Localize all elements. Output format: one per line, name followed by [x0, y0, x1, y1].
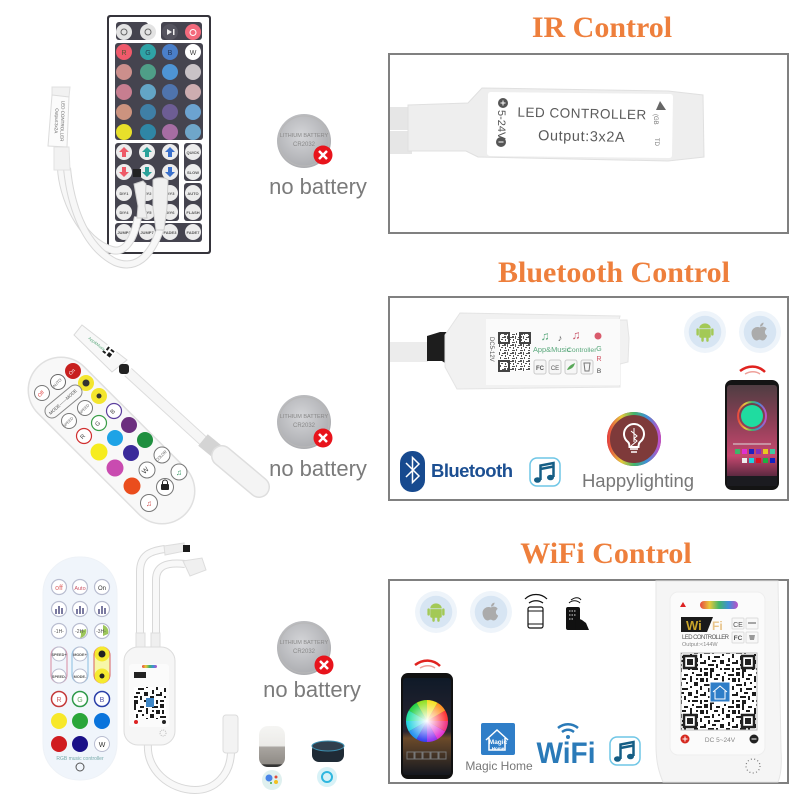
icon: android — [415, 591, 457, 633]
icon: apple — [739, 311, 781, 353]
Bluetooth controller close-up: ♫ — [572, 328, 580, 342]
Bluetooth controller close-up: ♫ — [540, 329, 550, 343]
WiFi remote control: Auto — [74, 586, 86, 592]
Bluetooth section — [34, 256, 788, 512]
IR remote control: DIY6 — [166, 210, 175, 215]
panel: IR controller close-up: TD — [653, 138, 659, 147]
IR remote control: SLOW — [187, 170, 199, 175]
logo: Bluetooth — [400, 451, 513, 492]
WiFi remote control: SPEED+ — [51, 653, 67, 657]
Bluetooth remote control — [34, 363, 187, 512]
Bluetooth controller close-up: B — [597, 368, 601, 375]
Bluetooth controller close-up: ♪ — [558, 333, 562, 343]
no battery badge: WiFi: LITHIUM BATTERY — [280, 640, 329, 646]
heading: IR Control: IR Control — [532, 11, 672, 44]
icon: music app — [610, 737, 640, 765]
IR remote control: DIY2 — [143, 191, 152, 196]
WiFi controller close-up: Wi — [686, 618, 702, 633]
mini IR controller with cables: LED CONTROLLER — [59, 101, 66, 142]
WiFi section — [43, 537, 788, 790]
Bluetooth remote control: COLOR — [154, 449, 168, 463]
WiFi remote control: MODE- — [74, 675, 87, 679]
no battery badge: Bluetooth: no battery — [269, 456, 367, 481]
IR remote control: FADE7 — [187, 230, 200, 235]
WiFi controller close-up: Output:<144W — [682, 642, 718, 648]
IR section — [48, 11, 788, 264]
WiFi controller close-up: DC 5~24V — [705, 737, 736, 744]
WiFi remote control: RGB music controller — [56, 756, 104, 762]
WiFi remote control: On — [98, 586, 106, 592]
IR remote control: JUMP7 — [140, 230, 154, 235]
label: Happylighting: Happylighting — [582, 470, 694, 491]
Bluetooth controller close-up: App&Music — [533, 345, 571, 354]
Bluetooth remote control: B — [110, 409, 117, 416]
icon: Magic Home app: Home — [492, 746, 505, 751]
heading: Bluetooth Control: Bluetooth Control — [498, 256, 730, 289]
icon: red signal arcs — [415, 661, 440, 668]
Bluetooth remote control: ♫ — [176, 468, 182, 477]
Bluetooth remote control: Off — [37, 389, 46, 399]
Bluetooth remote control: SPEED — [62, 416, 74, 428]
IR remote control: QUICK — [187, 150, 200, 155]
icon: apple — [470, 591, 512, 633]
IR remote control — [107, 15, 211, 254]
Bluetooth remote control: ♫ — [146, 499, 152, 508]
Bluetooth remote control: SPEED — [78, 403, 90, 415]
Bluetooth remote control: R — [80, 433, 87, 441]
no battery badge: WiFi: no battery — [263, 677, 361, 702]
panel: WiFi controller features — [389, 580, 788, 783]
WiFi remote control: G — [77, 697, 83, 704]
no battery badge: Bluetooth: LITHIUM BATTERY — [280, 414, 329, 420]
IR remote control: DIY1 — [120, 191, 129, 196]
WiFi remote control: MODE+ — [73, 653, 88, 657]
Bluetooth controller close-up: FC — [536, 366, 545, 372]
app screenshot: Bluetooth phone — [725, 380, 779, 490]
no battery badge: Bluetooth — [269, 395, 367, 481]
WiFi remote control: SPEED- — [52, 675, 67, 679]
Bluetooth remote control: G — [95, 420, 102, 428]
icon: smart speaker with assistant — [259, 726, 285, 790]
icon: hand with remote — [566, 598, 589, 630]
heading: WiFi Control: WiFi Control — [520, 537, 692, 570]
no battery badge: IR — [269, 114, 367, 199]
IR remote control: DIY5 — [143, 210, 152, 215]
IR remote control: FLASH — [186, 210, 200, 215]
Bluetooth mini controller and cable — [74, 325, 259, 487]
WiFi remote control: W — [99, 742, 106, 749]
logo: WiFi: WiFi — [536, 737, 596, 770]
mini IR controller with cables — [48, 87, 168, 264]
icon: android — [684, 311, 726, 353]
no battery badge: IR: no battery — [269, 174, 367, 199]
no battery badge: Bluetooth: CR2032 — [293, 423, 316, 429]
icon: echo dot with alexa — [312, 741, 344, 787]
IR remote control: B — [168, 50, 173, 57]
IR remote control: JUMP3 — [117, 230, 131, 235]
logo: WiFi — [536, 724, 596, 770]
panel: IR controller close-up: (GB — [652, 114, 658, 125]
WiFi controller close-up: LED CONTROLLER — [682, 635, 730, 641]
IR remote control: G — [145, 50, 151, 57]
WiFi remote control: -1H- — [54, 629, 64, 635]
Bluetooth remote control: AUTO — [51, 377, 63, 389]
WiFi remote control — [43, 557, 117, 780]
Bluetooth remote control: On — [68, 368, 77, 377]
panel: Bluetooth controller features — [389, 297, 788, 500]
WiFi remote control: B — [100, 697, 105, 704]
Bluetooth controller close-up: CE — [551, 366, 559, 372]
no battery badge: WiFi — [263, 621, 361, 702]
label: Magic Home: Magic Home — [465, 759, 533, 773]
Bluetooth controller close-up — [390, 313, 629, 389]
WiFi controller close-up: FC — [734, 635, 743, 642]
Bluetooth controller close-up: R — [596, 356, 602, 363]
IR remote control: AUTO — [187, 191, 199, 196]
IR remote control: DIY3 — [166, 191, 175, 196]
no battery badge: WiFi: CR2032 — [293, 649, 316, 655]
IR remote control: W — [190, 50, 197, 57]
panel: IR controller close-up — [389, 54, 788, 233]
icon: Magic Home app: Magic — [489, 739, 508, 746]
icon: Magic Home app — [481, 723, 515, 755]
IR remote control: FADE3 — [164, 230, 177, 235]
panel: IR controller close-up: LED CONTROLLER — [517, 105, 647, 122]
WiFi controller close-up — [656, 581, 781, 782]
IR remote control: DIY4 — [120, 210, 129, 215]
Bluetooth controller close-up: G — [596, 346, 602, 353]
WiFi remote control: off — [55, 585, 63, 592]
WiFi controller with cables — [124, 543, 238, 790]
mini IR controller with cables: Output:3x2A — [54, 108, 59, 133]
Bluetooth remote control: MODE——MODE — [48, 388, 78, 416]
no battery badge: IR: LITHIUM BATTERY — [280, 133, 329, 139]
app screenshot: WiFi phone — [401, 673, 453, 779]
no battery badge: IR: CR2032 — [293, 142, 316, 148]
WiFi remote control: -3H- — [96, 629, 106, 635]
WiFi remote control: R — [56, 697, 62, 704]
Bluetooth mini controller and cable: App&Music — [87, 336, 106, 352]
WiFi controller close-up: CE — [733, 622, 743, 629]
Bluetooth controller close-up: Controller — [567, 347, 597, 354]
icon: red signal arcs — [740, 367, 765, 374]
panel: IR controller close-up: 5-24V — [495, 110, 507, 140]
Bluetooth controller close-up: DC5-12V — [488, 337, 494, 362]
icon: music app — [530, 458, 560, 486]
panel: IR controller close-up: Output:3x2A — [538, 128, 625, 146]
WiFi controller close-up: Fi — [712, 619, 723, 633]
icon: Happylighting app bulb — [607, 412, 661, 466]
WiFi remote control: -2H- — [75, 629, 85, 635]
logo: Bluetooth: Bluetooth — [431, 460, 513, 481]
Bluetooth remote control: W — [141, 466, 151, 476]
icon: phone with wifi — [525, 594, 547, 628]
IR remote control: R — [121, 50, 127, 57]
